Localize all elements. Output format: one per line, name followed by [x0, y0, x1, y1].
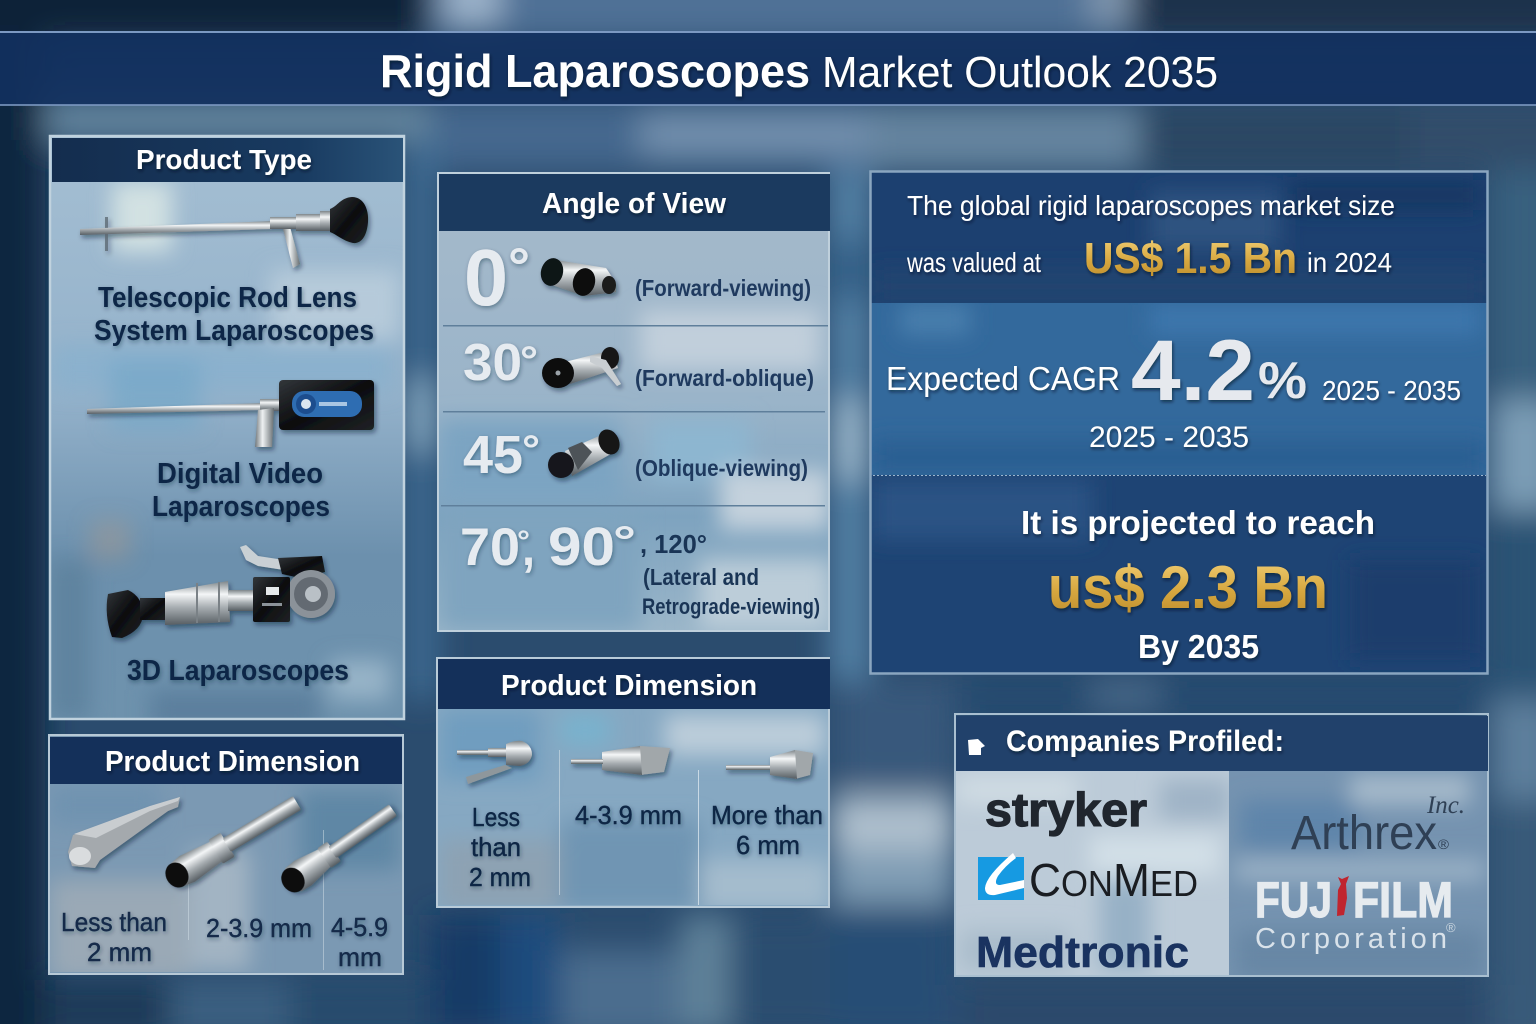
label: lateral and retrograde: , 120° — [640, 529, 707, 559]
text: market size line 2: US$ 1.5 Bn — [1084, 234, 1297, 283]
logo: fujifilm: ® — [1446, 920, 1456, 935]
text: projected to reach: us$ 2.3 Bn — [1048, 554, 1328, 621]
label: digital video — [152, 458, 330, 523]
text: projected to reach: It is projected to reach — [1021, 504, 1375, 541]
value: 0 degrees: 0 — [464, 233, 508, 322]
logo: conmed: CONMED — [1029, 854, 1198, 906]
heading: angle of view: Angle of View — [542, 188, 726, 220]
text: expected CAGR: % — [1258, 352, 1307, 410]
logo: fujifilm: FUJ — [1255, 872, 1332, 928]
panel: companies profiled — [955, 714, 1489, 980]
labels: product dimension middle: than — [471, 832, 521, 862]
icon: medium scope tip — [160, 790, 305, 894]
logo: stryker: stryker — [985, 783, 1147, 836]
icon: companies bullet — [968, 739, 985, 755]
value: 0 degrees: ° — [508, 238, 530, 296]
panel: product type — [49, 135, 405, 730]
icon: large scope tip — [275, 798, 402, 899]
heading: product dimension middle: Product Dimension — [501, 670, 757, 702]
text: market size line 2 — [906, 234, 1392, 283]
text: market size line 1: The global rigid laparoscopes market size — [907, 190, 1395, 221]
value: 70 and 90 degrees: ° — [613, 517, 636, 564]
title: Market Outlook 2035 — [822, 48, 1218, 97]
labels: product dimension left: 4-5.9 — [331, 912, 388, 942]
value: 0 degrees — [464, 233, 530, 322]
labels: product dimension left: Less than — [61, 907, 167, 937]
title — [380, 45, 1218, 97]
logo: fujifilm: FILM — [1353, 872, 1453, 928]
text: market size line 2: in 2024 — [1307, 247, 1392, 278]
text: expected CAGR — [886, 323, 1461, 454]
text: projected to reach: By 2035 — [1138, 628, 1259, 665]
panel background: product type — [49, 135, 405, 730]
logo: fujifilm — [1255, 872, 1456, 955]
value: 45 degrees: ° — [522, 428, 540, 472]
heading: product type: Product Type — [136, 144, 312, 175]
icon: 45 degree scope — [548, 426, 624, 478]
icon: 0 degree scope — [538, 256, 616, 298]
labels: product dimension middle: More than — [711, 800, 823, 830]
label: lateral and retrograde: Retrograde-viewing) — [642, 594, 820, 619]
label: oblique-viewing: (Oblique-viewing) — [635, 455, 808, 481]
labels: product dimension middle — [469, 800, 823, 892]
labels: product dimension middle: Less — [472, 802, 520, 832]
logo: medtronic: Medtronic — [976, 928, 1189, 977]
value: 70 and 90 degrees: 70 — [460, 518, 520, 577]
icon: digital video laparoscope — [87, 380, 374, 447]
labels: product dimension middle: 2 mm — [469, 862, 531, 892]
logo: arthrex: Inc. — [1426, 792, 1465, 819]
logo: arthrex: ® — [1438, 836, 1450, 852]
label: digital video: Laparoscopes — [152, 491, 330, 523]
panel background: product dimension left — [48, 734, 404, 980]
text: market size line 2: was valued at — [906, 247, 1041, 278]
logo: arthrex: Arthrex — [1291, 807, 1437, 860]
heading: companies profiled: Companies Profiled: — [1006, 725, 1284, 758]
value: 70 and 90 degrees: ° — [517, 525, 530, 558]
text: expected CAGR: 4.2 — [1131, 323, 1255, 419]
text: projected to reach — [1021, 504, 1375, 665]
panel: product dimension middle — [436, 657, 830, 910]
label: telescopic rod lens: System Laparoscopes — [94, 315, 374, 347]
value: 30 degrees: 30 — [463, 334, 522, 392]
icon: small tip — [457, 741, 532, 784]
panel background: angle of view — [437, 172, 830, 632]
text: expected CAGR: Expected CAGR — [886, 360, 1120, 397]
labels: product dimension middle: 4-3.9 mm — [575, 800, 682, 830]
label: 3D laparoscopes: 3D Laparoscopes — [127, 655, 349, 687]
label: telescopic rod lens — [94, 282, 374, 347]
label: telescopic rod lens: Telescopic Rod Lens — [98, 282, 357, 314]
label: lateral and retrograde: (Lateral and — [643, 564, 759, 590]
row: 45 degrees — [463, 425, 808, 485]
panel: market statistics — [870, 172, 1488, 674]
text: expected CAGR: 2025 - 2035 — [1089, 421, 1249, 454]
header band — [0, 31, 1536, 106]
label: digital video: Digital Video — [157, 458, 323, 490]
icon: thin scope tip — [68, 797, 180, 868]
panel background: companies — [955, 714, 1489, 980]
row: 30 degrees — [463, 334, 814, 392]
label: lateral and retrograde — [640, 529, 820, 619]
icon: 30 degree scope — [542, 347, 621, 388]
value: 70 and 90 degrees — [460, 517, 636, 577]
labels: product dimension middle: 6 mm — [736, 830, 800, 860]
row: 70 90 120 degrees — [460, 517, 820, 619]
row: 0 degrees — [464, 233, 811, 322]
logo: fujifilm: Corporation — [1255, 923, 1447, 955]
value: 45 degrees: 45 — [463, 425, 523, 485]
labels: product dimension left: 2-3.9 mm — [206, 913, 312, 943]
labels: product dimension left: mm — [338, 942, 382, 972]
icon: medium tip — [571, 746, 670, 775]
logo: arthrex — [1291, 792, 1465, 860]
section: market size — [871, 172, 1487, 303]
value: 70 and 90 degrees: , — [522, 520, 535, 576]
section: projection — [871, 475, 1487, 673]
panel: angle of view — [437, 172, 830, 632]
section: CAGR — [871, 303, 1487, 475]
label: forward-viewing: (Forward-viewing) — [635, 275, 811, 301]
panel background: product dimension middle — [436, 657, 830, 910]
panel: product dimension left — [48, 734, 404, 980]
labels: product dimension left — [61, 907, 388, 972]
label: forward-oblique: (Forward-oblique) — [635, 365, 814, 391]
title: Rigid Laparoscopes — [380, 45, 810, 97]
icon: telescopic rod lens laparoscope — [80, 197, 368, 268]
icon: large tip — [726, 750, 813, 779]
value: 70 and 90 degrees: 90 — [548, 517, 615, 577]
value: 30 degrees: ° — [520, 339, 538, 383]
heading: product dimension left: Product Dimension — [105, 746, 360, 778]
text: expected CAGR: 2025 - 2035 — [1322, 375, 1461, 406]
icon: 3D laparoscope — [107, 545, 335, 638]
labels: product dimension left: 2 mm — [87, 937, 152, 967]
